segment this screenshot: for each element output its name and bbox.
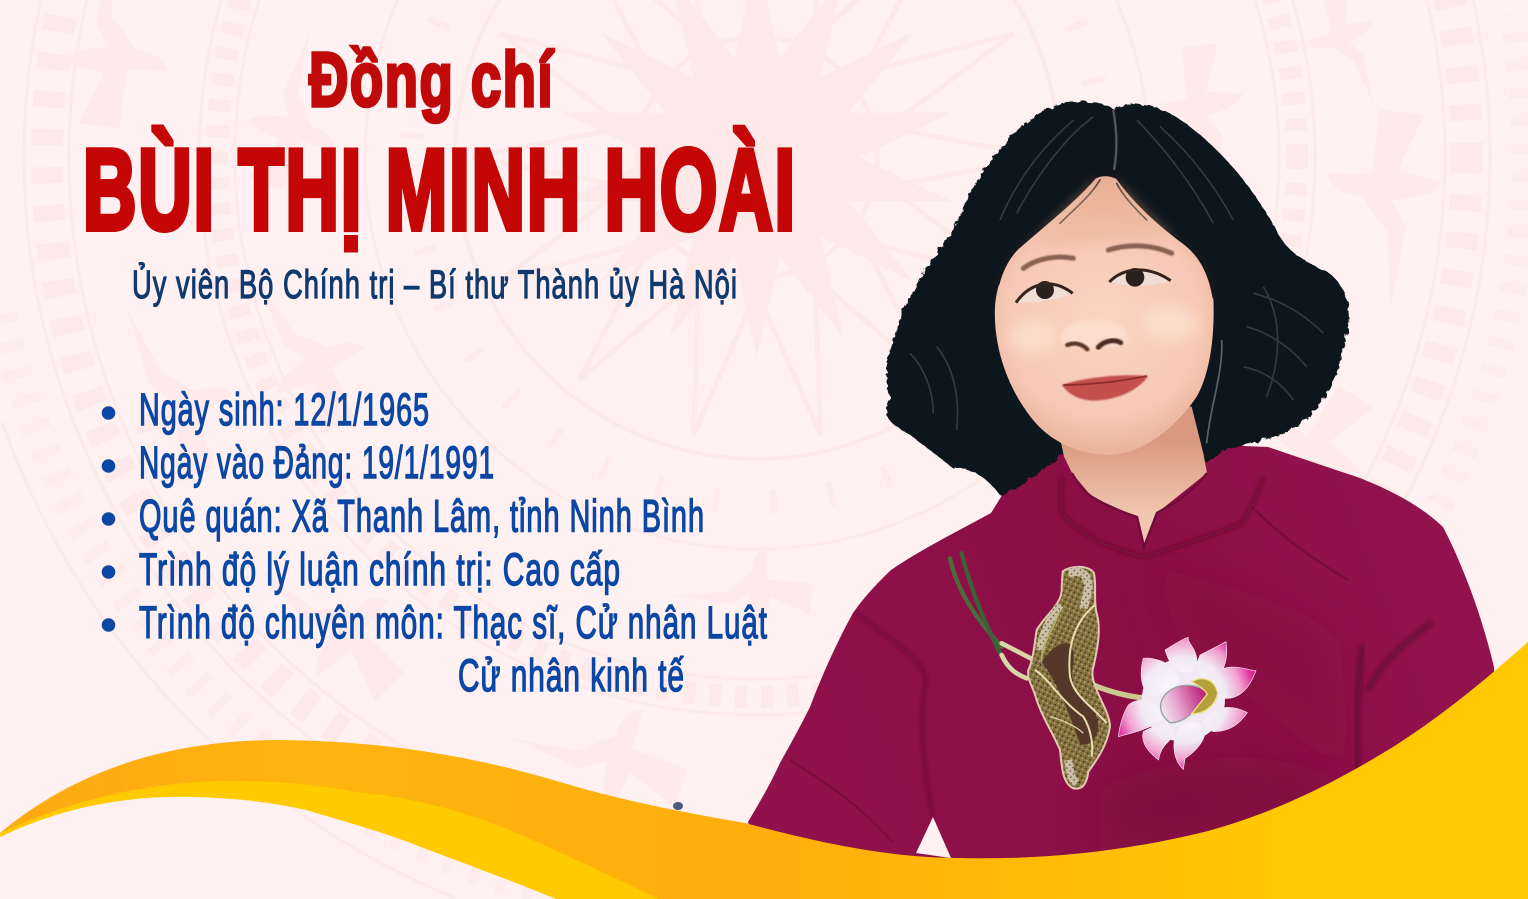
lips bbox=[1062, 375, 1148, 401]
collar bbox=[1060, 473, 1263, 557]
item: home town: Quê quán: Xã Thanh Lâm, tỉnh Ninh Bình bbox=[139, 490, 705, 542]
portrait bbox=[748, 102, 1500, 860]
eyebrows bbox=[1023, 246, 1172, 268]
eye: right bbox=[1109, 268, 1171, 287]
item: date of birth bbox=[102, 384, 430, 435]
item: party admission date: Ngày vào Đảng: 19/1/1991 bbox=[139, 437, 495, 488]
nose bbox=[1060, 320, 1128, 349]
gap between arm and body bbox=[916, 817, 951, 858]
forehead shade bbox=[1033, 187, 1170, 247]
item: political theory level bbox=[102, 544, 621, 595]
title: name: BÙI THỊ MINH HOÀI bbox=[83, 127, 797, 254]
sleeve seams and folds bbox=[790, 507, 1432, 842]
hair back bbox=[887, 102, 1349, 495]
item: professional qualification: Cử nhân kinh tế bbox=[458, 650, 685, 701]
small pen tip bbox=[673, 802, 683, 810]
face bbox=[995, 176, 1214, 455]
biography list bbox=[102, 384, 768, 701]
embroidery, coordinates from 3x crop bbox=[950, 553, 1256, 789]
head and hair, coordinates from 3x crop bbox=[887, 102, 1349, 547]
dress bbox=[748, 440, 1500, 860]
item: professional qualification: Trình độ chuyên môn: Thạc sĩ, Cử nhân Luật bbox=[139, 597, 768, 648]
yellow swoosh band bbox=[0, 642, 1528, 899]
neck bbox=[1058, 407, 1207, 547]
item: home town bbox=[102, 490, 705, 542]
cheek highlights bbox=[1010, 305, 1197, 353]
item: date of birth: Ngày sinh: 12/1/1965 bbox=[139, 384, 430, 435]
item: professional qualification bbox=[102, 597, 768, 701]
eye: left bbox=[1016, 281, 1073, 303]
swoosh: lower yellow band bbox=[0, 770, 700, 899]
drum chevrons bbox=[472, 0, 1042, 442]
drum star bbox=[554, 0, 960, 357]
subtitle: Ủy viên Bộ Chính trị – Bí thư Thành ủy Hà Nội bbox=[132, 261, 738, 307]
hair highlights bbox=[910, 110, 1323, 443]
item: political theory level: Trình độ lý luận chính trị: Cao cấp bbox=[139, 544, 621, 595]
lotus flower bbox=[1118, 637, 1256, 769]
lotus stems bbox=[950, 553, 1147, 698]
title: Đồng chí: Đồng chí bbox=[309, 37, 554, 123]
swoosh: main orange band bbox=[0, 642, 1528, 899]
forehead fringe strands bbox=[997, 175, 1215, 297]
item: party admission date bbox=[102, 437, 495, 488]
lotus leaf bbox=[1028, 567, 1110, 789]
